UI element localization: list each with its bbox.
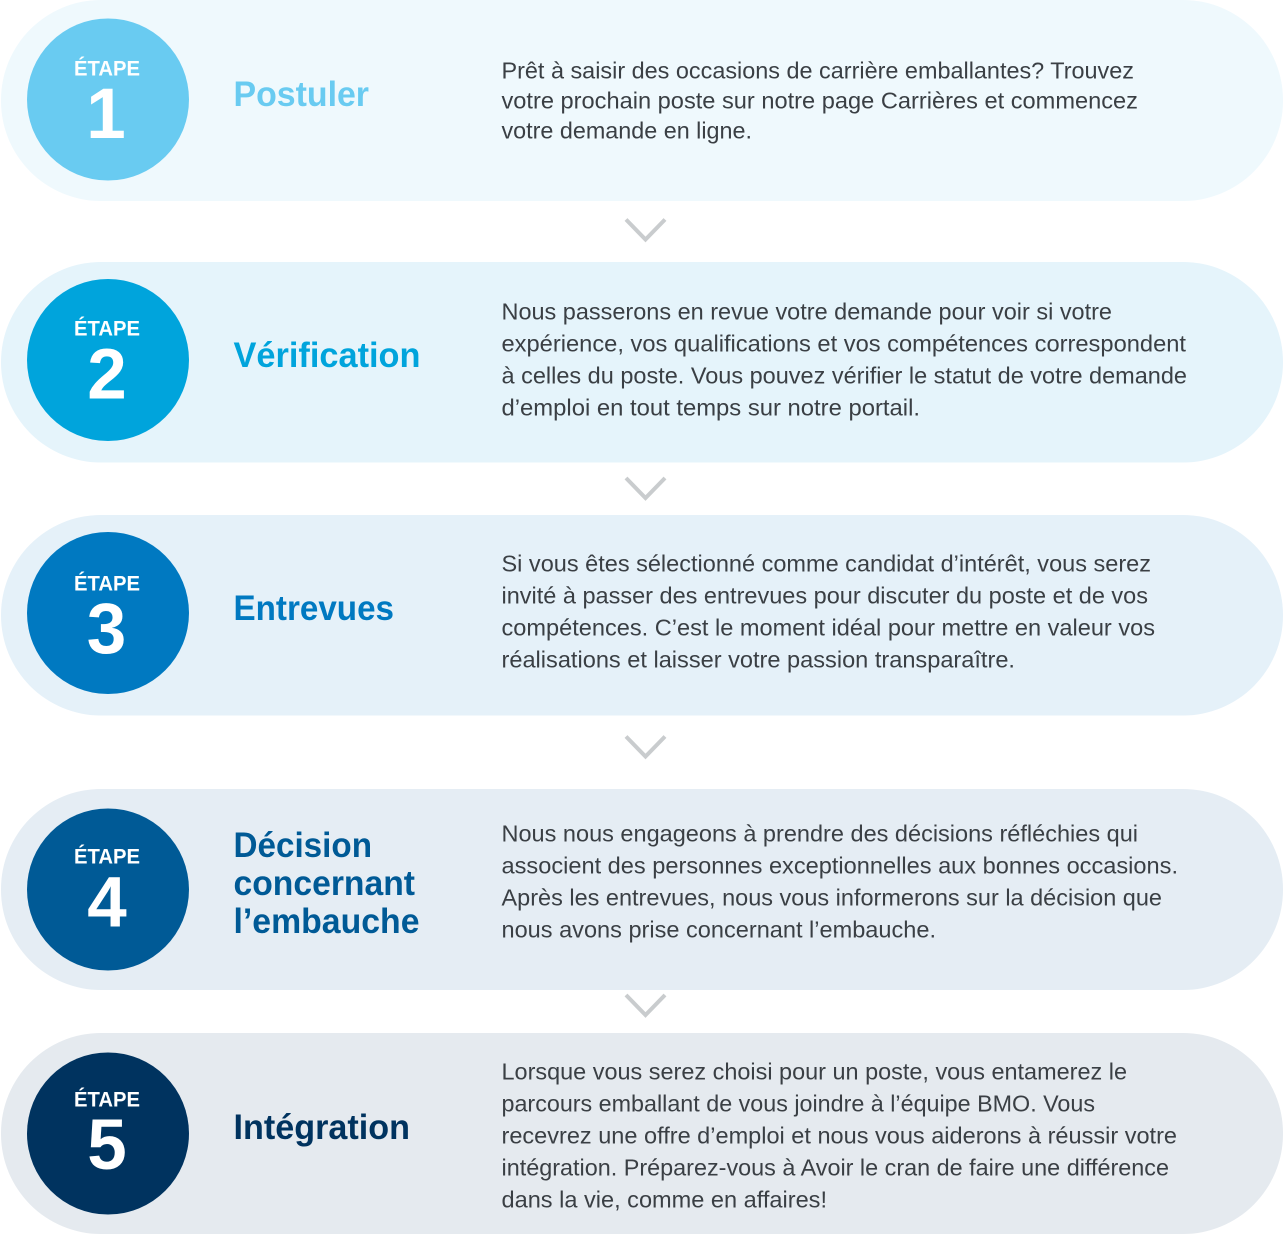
step 2 badge: ÉTAPE <box>74 318 140 340</box>
step 3 description: compétences. C’est le moment idéal pour mettre en valeur vos <box>502 614 1155 640</box>
arrow: step 2 to 3 <box>626 478 665 498</box>
step 5 description: parcours emballant de vous joindre à l’équipe BMO. Vous <box>502 1090 1095 1116</box>
step 4 badge: 4 <box>87 864 127 942</box>
step 4 heading: l’embauche <box>234 902 420 941</box>
step 5 description: recevrez une offre d’emploi et nous vous aiderons à réussir votre <box>502 1122 1177 1148</box>
step 3 description <box>502 550 1155 672</box>
step 1 description: votre prochain poste sur notre page Carrières et commencez <box>502 88 1138 114</box>
arrow: step 4 to 5 <box>626 995 665 1015</box>
panel: step 3 Entrevues <box>1 515 1283 716</box>
arrow: step 3 to 4 <box>626 736 665 756</box>
step 4 heading <box>234 826 420 941</box>
step 4 description: Après les entrevues, nous vous informerons sur la décision que <box>502 884 1162 910</box>
step 5 badge: ÉTAPE <box>74 1088 140 1112</box>
arrow: step 1 to 2 <box>626 220 665 240</box>
step 2 badge: 2 <box>87 336 127 414</box>
step 4 description <box>502 820 1178 942</box>
step 2 badge <box>27 279 189 441</box>
step 5 description: intégration. Préparez-vous à Avoir le cran de faire une différence <box>502 1154 1169 1180</box>
step 5 badge: 5 <box>87 1106 127 1185</box>
step 4 description: Nous nous engageons à prendre des décisions réfléchies qui <box>502 820 1138 846</box>
step 3 badge: ÉTAPE <box>74 572 140 596</box>
step 3 heading: Entrevues <box>234 589 394 628</box>
step 4 badge: ÉTAPE <box>74 846 140 868</box>
panel: step 5 Intégration <box>1 1033 1283 1234</box>
step 3 description: réalisations et laisser votre passion transparaître. <box>502 646 1015 672</box>
step 4 badge <box>27 808 189 970</box>
step 4 description: nous avons prise concernant l’embauche. <box>502 916 936 942</box>
step 2 description <box>502 298 1187 420</box>
step 1 description: votre demande en ligne. <box>502 118 752 144</box>
step 5 description: dans la vie, comme en affaires! <box>502 1186 827 1212</box>
step 1 heading: Postuler <box>234 75 369 114</box>
step 2 description: Nous passerons en revue votre demande pour voir si votre <box>502 298 1112 324</box>
step 4 heading: Décision <box>234 826 372 865</box>
step 4 description: associent des personnes exceptionnelles aux bonnes occasions. <box>502 852 1178 878</box>
step 2 heading: Vérification <box>234 336 420 375</box>
step 1 description <box>502 58 1138 144</box>
step 5 description <box>502 1058 1177 1212</box>
step 3 badge: 3 <box>87 590 126 669</box>
step 5 heading: Intégration <box>234 1108 410 1147</box>
step 2 description: à celles du poste. Vous pouvez vérifier le statut de votre demande <box>502 362 1187 388</box>
step 5 description: Lorsque vous serez choisi pour un poste, vous entamerez le <box>502 1058 1127 1084</box>
step 1 badge <box>27 18 189 180</box>
step 2 description: d’emploi en tout temps sur notre portail. <box>502 394 920 420</box>
panel: step 4 Décision concernant l'embauche <box>1 789 1283 990</box>
step 3 badge <box>27 532 189 694</box>
step 1 badge: ÉTAPE <box>74 58 140 80</box>
step 3 description: invité à passer des entrevues pour discuter du poste et de vos <box>502 582 1148 608</box>
step 5 badge <box>27 1052 189 1214</box>
panel: step 2 Vérification <box>1 262 1283 462</box>
step 1 description: Prêt à saisir des occasions de carrière emballantes? Trouvez <box>502 58 1134 84</box>
panel: step 1 Postuler <box>1 0 1283 201</box>
step 1 badge: 1 <box>86 75 126 154</box>
step 3 description: Si vous êtes sélectionné comme candidat d’intérêt, vous serez <box>502 550 1151 576</box>
step 4 heading: concernant <box>234 864 415 903</box>
step 2 description: expérience, vos qualifications et vos compétences correspondent <box>502 330 1187 356</box>
